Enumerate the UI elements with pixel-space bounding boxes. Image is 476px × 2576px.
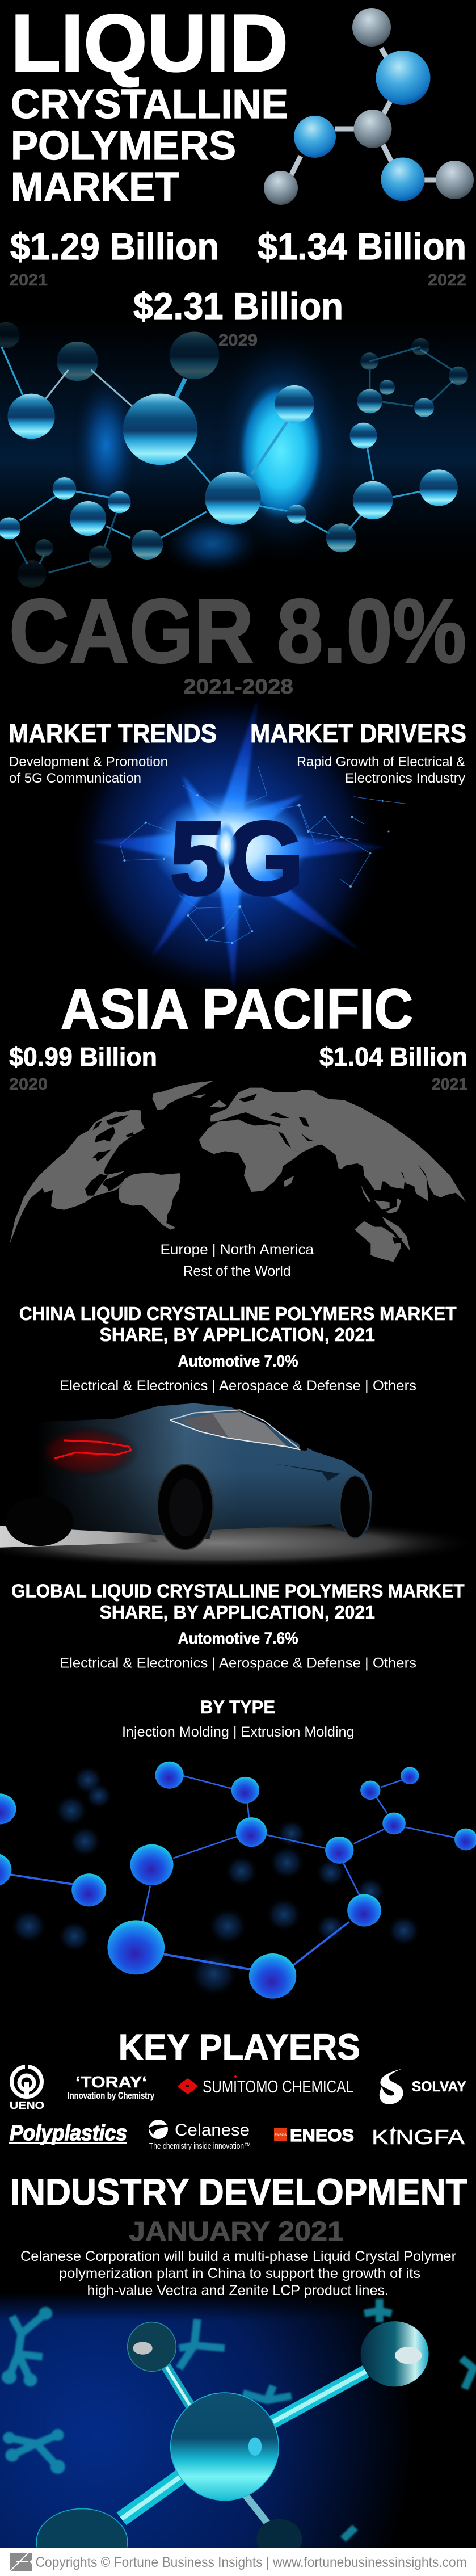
market trends: MARKET TRENDS (9, 718, 217, 748)
heading: Asia Pacific: ASIA PACIFIC (61, 977, 413, 1041)
title (11, 0, 288, 210)
title: POLYMERS (11, 123, 236, 169)
stat: Asia Pacific 2020 (9, 1042, 157, 1094)
heading: Global market share: Automotive 7.6% (178, 1630, 298, 1648)
heading: China market share (19, 1304, 457, 1394)
development description (20, 2249, 456, 2298)
logo: Toray: Innovation by Chemistry (68, 2090, 154, 2101)
heading: Global market share: Electrical & Electronics | Aerospace & Defense | Others (60, 1655, 416, 1671)
stat: Asia Pacific 2021 (319, 1042, 467, 1094)
heading: Global market share: SHARE, BY APPLICATION, 2021 (100, 1602, 375, 1623)
logo: Celanese: The chemistry inside innovation™ (149, 2141, 251, 2151)
market trends: Development & Promotion (9, 754, 168, 770)
heading: key players: KEY PLAYERS (119, 2027, 360, 2067)
market trends: of 5G Communication (9, 771, 141, 786)
stat: CAGR: 2021-2028 (183, 675, 293, 698)
development description: polymerization plant in China to support the growth of its (59, 2266, 420, 2281)
tail light (36, 1426, 140, 1478)
stat: 2029 market value (133, 285, 343, 350)
logo: Sumitomo Chemical: SUMITOMO CHEMICAL (203, 2077, 353, 2096)
heading: Global market share (11, 1581, 465, 1671)
wheels (6, 1464, 370, 1549)
development description: high-value Vectra and Zenite LCP product lines. (87, 2283, 389, 2298)
image: sports car (0, 1403, 476, 1568)
image: glass molecules with blue glow (0, 318, 476, 588)
market trends (9, 718, 217, 786)
logo: Eneos: ENEOS (275, 2134, 287, 2137)
logo: Toray (68, 2073, 154, 2101)
windows (170, 1410, 311, 1451)
icon: molecule with grey and blue atoms (264, 8, 474, 205)
title: LIQUID (11, 0, 288, 89)
logo: Solvay (380, 2069, 466, 2104)
image: 5G burst (68, 692, 407, 999)
stat: 2022 market value: $1.34 Billion (258, 225, 466, 267)
stat: Asia Pacific 2021: $1.04 Billion (319, 1042, 467, 1071)
market drivers (250, 718, 466, 786)
stat: Asia Pacific 2020: $0.99 Billion (9, 1042, 157, 1071)
logo: Celanese (149, 2120, 251, 2151)
title: MARKET (11, 165, 179, 210)
background small molecules (2, 2299, 474, 2539)
logo: Celanese: Celanese (175, 2121, 250, 2140)
heading: China market share: SHARE, BY APPLICATION, 2021 (100, 1325, 375, 1346)
regions list (160, 1242, 314, 1279)
stat: 2021 market value: 2021 (9, 271, 48, 289)
5G lettering: 5G (170, 800, 304, 916)
development description: Celanese Corporation will build a multi-phase Liquid Crystal Polymer (20, 2249, 456, 2264)
stat: 2021 market value (9, 225, 219, 289)
logo: Kingfa: KINGFA (372, 2125, 465, 2149)
logo: Fortune Business Insights mark (10, 2553, 32, 2571)
by type: BY TYPE (200, 1697, 275, 1717)
footer bar (0, 2548, 476, 2576)
heading: China market share: CHINA LIQUID CRYSTALLINE POLYMERS MARKET (19, 1304, 457, 1325)
market drivers: Electronics Industry (345, 771, 465, 786)
stat: 2029 market value: 2029 (218, 331, 258, 350)
bonds (121, 2365, 366, 2531)
title: CRYSTALLINE (11, 82, 288, 127)
image: glowing molecule on navy (0, 2293, 476, 2575)
by type: Injection Molding | Extrusion Molding (122, 1724, 354, 1740)
stat: 2021 market value: $1.29 Billion (10, 225, 219, 267)
network lines (120, 766, 407, 944)
logo: Polyplastics: Polyplastics (10, 2121, 127, 2145)
atoms (128, 2322, 176, 2371)
logo: Sumitomo Chemical (178, 2075, 353, 2096)
stat: Asia Pacific 2020: 2020 (9, 1075, 48, 1094)
logo: Eneos: ENEOS (290, 2125, 354, 2145)
stat: Asia Pacific 2021: 2021 (432, 1075, 467, 1094)
heading: China market share: Electrical & Electronics | Aerospace & Defense | Others (60, 1378, 416, 1394)
regions list: Rest of the World (183, 1263, 291, 1279)
market drivers: Rapid Growth of Electrical & (297, 754, 465, 770)
by type (122, 1697, 354, 1740)
image: blue molecule chain (0, 1762, 476, 1999)
world map globe (10, 1081, 466, 1262)
regions list: Europe | North America (160, 1242, 314, 1258)
logo: Solvay: SOLVAY (412, 2079, 466, 2095)
logo: UENO (10, 2064, 44, 2111)
heading: China market share: Automotive 7.0% (178, 1352, 298, 1371)
stat: 2022 market value: 2022 (428, 271, 466, 289)
date: JANUARY 2021 (129, 2217, 344, 2247)
logo: Toray: ‘TORAY‘ (75, 2073, 147, 2091)
logo: UENO: UENO (10, 2100, 44, 2111)
stat: 2029 market value: $2.31 Billion (133, 285, 343, 327)
stat: 2022 market value (258, 225, 466, 289)
